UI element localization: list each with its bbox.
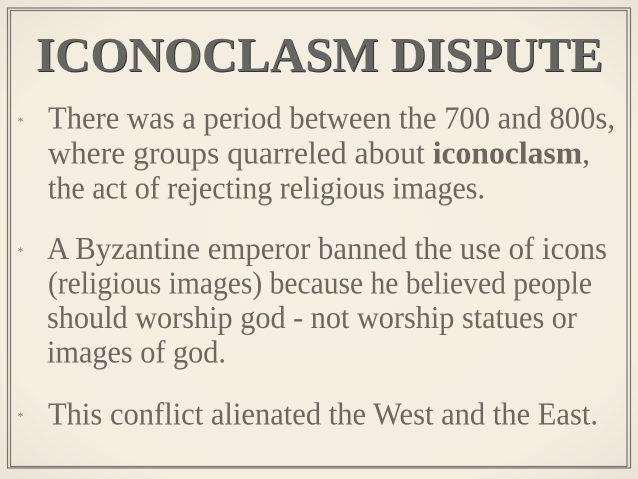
title: ICONOCLASM DISPUTE [36, 27, 603, 82]
bullet 3: * [18, 409, 24, 423]
title: ICONOCLASM DISPUTE [37, 28, 604, 83]
text block 1: where groups quarreled about iconoclasm, [48, 136, 590, 170]
text block 2: images of god. [47, 334, 226, 370]
text block 3: This conflict alienated the West and the East. [48, 396, 598, 432]
bullet 1: * [18, 114, 24, 128]
text block 1: the act of rejecting religious images. [48, 170, 485, 206]
text block 2 [47, 231, 607, 370]
text block 1 [48, 100, 615, 206]
text block 2: (religious images) because he believed people [48, 266, 592, 300]
bullet 2: * [18, 244, 24, 258]
text block 1: There was a period between the 700 and 800s, [48, 100, 615, 136]
text block 2: should worship god - not worship statues or [47, 300, 577, 335]
text block 2: A Byzantine emperor banned the use of icons [47, 231, 607, 266]
